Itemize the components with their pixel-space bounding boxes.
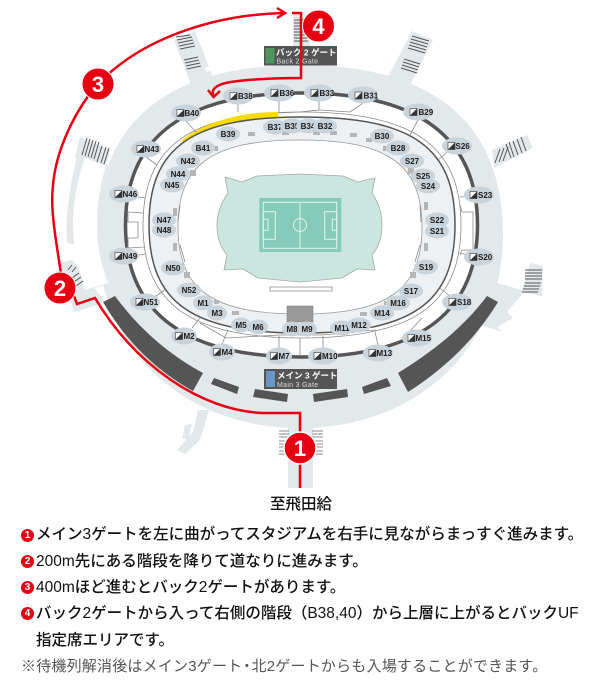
- soccer pitch: [259, 198, 341, 252]
- bullet 2: [21, 555, 34, 568]
- badge S21: S21: [430, 227, 445, 236]
- badge N45: N45: [165, 181, 180, 190]
- scoreboard block: [287, 306, 313, 322]
- red route line: back gate entrance to stairs: [213, 13, 301, 95]
- bullet 1: [21, 529, 34, 542]
- badge N52: [177, 282, 201, 298]
- badge M16: [386, 296, 410, 310]
- main seating outer ring: [126, 93, 478, 357]
- badge M12: [347, 318, 371, 332]
- badge N48: [152, 222, 176, 238]
- badge M10: M10: [322, 352, 338, 361]
- badge M11: [330, 320, 354, 336]
- badge N44: [166, 166, 190, 182]
- badge B38: [223, 88, 253, 104]
- badge M15: [402, 330, 432, 346]
- badge S18: S18: [457, 298, 472, 307]
- badge N42: [176, 154, 200, 168]
- step marker 4: 4: [312, 14, 325, 39]
- badge M5: [231, 318, 251, 332]
- badge B37: B37: [268, 123, 283, 132]
- badge S26: [442, 138, 472, 154]
- badge B33: B33: [320, 89, 335, 98]
- badge M11: M11: [334, 324, 350, 333]
- badge N47: [152, 212, 176, 228]
- badge B36: B36: [280, 89, 295, 98]
- main 3 gate label: Main 3 Gate: [277, 382, 318, 389]
- badge M3: [207, 306, 227, 320]
- badge M15: M15: [416, 334, 432, 343]
- bullet 2: 2: [25, 556, 30, 567]
- badge N43: [131, 140, 161, 158]
- badge S20: [464, 248, 494, 266]
- badge M2: [171, 328, 197, 344]
- badge M14: M14: [374, 309, 390, 318]
- badge N42: N42: [181, 157, 196, 166]
- bullet 3: 3: [25, 582, 30, 593]
- small stair marks: [173, 131, 428, 316]
- badge B35: [280, 118, 304, 134]
- structure outlines and connectors: [128, 101, 473, 355]
- badge S25: S25: [416, 172, 431, 181]
- badge M1: [193, 296, 213, 310]
- field surround: [217, 174, 382, 282]
- bullet 4: [21, 607, 34, 620]
- stairs: hatch marks at the gates: [68, 20, 542, 454]
- badge S21: [425, 224, 449, 238]
- badge B35: B35: [285, 122, 300, 131]
- badge S24: S24: [421, 182, 436, 191]
- dark roofed walkway blocks: [103, 296, 498, 402]
- badge B30: [370, 128, 394, 144]
- badge B28: [386, 140, 410, 156]
- badge N44: N44: [171, 170, 186, 179]
- badge B36: [264, 84, 295, 102]
- badge M10: [308, 348, 338, 364]
- badge M13: M13: [376, 349, 393, 358]
- badge B30: B30: [375, 132, 390, 141]
- badge B34: B34: [301, 122, 316, 131]
- step marker 1: 1: [294, 436, 306, 461]
- step marker 3: [82, 68, 114, 100]
- step marker 2: [44, 272, 76, 304]
- step marker 1: [284, 432, 316, 464]
- back 2 gate label: Back 2 Gate: [276, 58, 318, 66]
- badge M4: M4: [222, 348, 233, 357]
- badge B32: [313, 118, 337, 134]
- thin corridor outline: [143, 112, 461, 338]
- badge B29: [403, 104, 434, 120]
- main 3 gate label: メイン 3 ゲート: [277, 370, 337, 380]
- badge B39: B39: [221, 130, 236, 139]
- badge M5: M5: [235, 321, 247, 330]
- red route line: gate 1 to 2: [74, 296, 300, 488]
- badge B41: [191, 140, 215, 156]
- badge B40: B40: [184, 109, 200, 118]
- badge B38: B38: [238, 92, 253, 101]
- badge S17: S17: [404, 287, 419, 296]
- stadium map: [44, 7, 543, 513]
- badge S22: [425, 212, 449, 228]
- badge M8: M8: [286, 325, 298, 334]
- badge B40: [171, 104, 201, 122]
- badge N43: N43: [144, 145, 160, 154]
- badge N52: N52: [182, 286, 197, 295]
- badge M14: [370, 306, 394, 320]
- badge N48: N48: [157, 226, 172, 235]
- badge S20: S20: [478, 253, 493, 262]
- inner gate badges: [152, 118, 449, 336]
- direction label: 至飛田給: [270, 495, 332, 513]
- badge B32: B32: [318, 122, 333, 131]
- badge N49: [109, 248, 139, 264]
- badge B39: [216, 126, 240, 142]
- yellow back UF reserved seating area: [181, 112, 278, 144]
- badge B31: [348, 86, 379, 104]
- badge M7: [266, 348, 292, 364]
- back 2 gate label: バック 2 ゲート: [276, 48, 336, 58]
- badge S23: [464, 186, 494, 204]
- step marker 3: 3: [92, 72, 104, 97]
- badge N45: [160, 178, 184, 192]
- badge B33: [304, 84, 335, 102]
- badge N51: N51: [144, 298, 159, 307]
- badge N49: N49: [122, 252, 138, 261]
- badge N50: [161, 260, 185, 276]
- step 2 text: 200m先にある階段を降りて道なりに進みます。: [36, 553, 368, 570]
- outer concourse grounds: [60, 14, 543, 488]
- red route line: 2 to 3 to back gate: [52, 13, 283, 280]
- badge M8: [282, 322, 302, 336]
- step marker 2: 2: [54, 276, 66, 301]
- badge S17: [399, 284, 423, 298]
- badge M13: [363, 344, 393, 362]
- badge M9: [297, 322, 317, 336]
- badge M1: M1: [197, 299, 209, 308]
- footnote: ※待機列解消後はメイン3ゲート・北2ゲートからも入場することができます。: [21, 658, 547, 675]
- bullet 1: 1: [25, 530, 30, 541]
- badge B37: [263, 120, 287, 134]
- badge M12: M12: [351, 321, 367, 330]
- main 3 gate label: [264, 369, 337, 389]
- inner bowl: [178, 140, 422, 314]
- badge M16: M16: [390, 299, 406, 308]
- badge S18: [442, 294, 472, 310]
- badge N47: N47: [157, 216, 172, 225]
- badge S19: [414, 260, 438, 274]
- step 4 text: バック2ゲートから入って右側の階段（B38,40）から上層に上がるとバックUF: [36, 605, 579, 622]
- badge S22: S22: [430, 216, 445, 225]
- badge S23: S23: [478, 191, 493, 200]
- instructions: [21, 526, 583, 675]
- arrow head at back gate: [277, 8, 285, 18]
- badge M2: M2: [184, 332, 195, 341]
- badge M3: M3: [211, 309, 223, 318]
- badge B29: B29: [418, 108, 434, 117]
- step 4 text continued: 指定席エリアです。: [36, 632, 174, 649]
- badge B34: [296, 118, 320, 134]
- step 1 text: メイン3ゲートを左に曲がってスタジアムを右手に見ながらまっすぐ進みます。: [36, 526, 583, 543]
- step 3 text: 400mほど進むとバック2ゲートがあります。: [36, 579, 345, 596]
- badge M7: M7: [278, 352, 290, 361]
- badge S19: S19: [419, 263, 434, 272]
- badge M4: [209, 344, 235, 360]
- inner ring: [149, 117, 455, 333]
- badge B41: B41: [196, 144, 211, 153]
- badge M6: [248, 320, 268, 334]
- badge N51: [130, 294, 160, 310]
- badge N50: N50: [166, 264, 181, 273]
- badge S27: [400, 154, 424, 168]
- outer gate badges: [109, 84, 494, 364]
- badge S27: S27: [405, 157, 420, 166]
- badge B28: B28: [391, 144, 406, 153]
- badge S25: [411, 168, 435, 184]
- badge B31: B31: [364, 92, 379, 100]
- bullet 4: 4: [25, 608, 30, 619]
- badge N46: N46: [122, 190, 138, 199]
- bullet 3: [21, 581, 34, 594]
- badge N46: [109, 186, 139, 202]
- back 2 gate label: [264, 46, 337, 66]
- badge S26: S26: [456, 142, 470, 151]
- badge M9: M9: [301, 325, 313, 334]
- badge S24: [416, 178, 440, 194]
- arrow head at stairs: [208, 90, 220, 97]
- white walkway strips: [73, 58, 263, 290]
- badge M6: M6: [252, 323, 264, 332]
- step marker 4: [302, 10, 334, 42]
